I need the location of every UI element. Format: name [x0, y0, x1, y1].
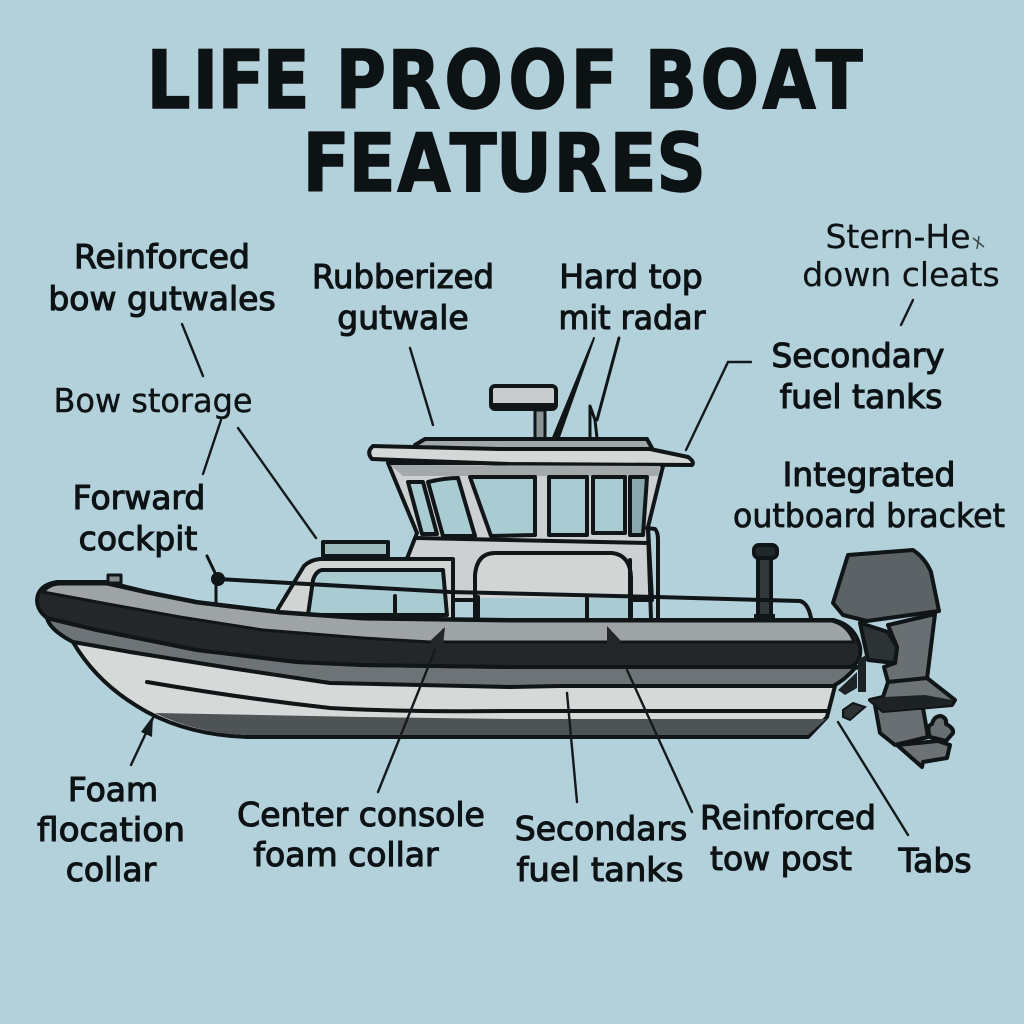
label: reinforced bow gutwales: Reinforced — [74, 237, 250, 276]
label: hard top: Hard top — [559, 257, 703, 296]
handrail — [207, 556, 811, 618]
label: integrated outboard bracket: Integrated — [783, 455, 955, 494]
label: forward cockpit: Forward — [73, 478, 205, 517]
lower grey band — [47, 618, 860, 687]
label: forward cockpit: cockpit — [79, 519, 197, 558]
bow cleat — [108, 575, 121, 583]
rubber collar — [37, 582, 860, 667]
label: stern tie down cleats: down cleats — [802, 255, 1000, 294]
transom and trim tab — [838, 655, 866, 720]
label: integrated outboard bracket — [733, 455, 1005, 535]
lower cabin glass — [480, 598, 630, 620]
title — [147, 34, 863, 210]
title: LIFE PROOF BOAT — [147, 34, 863, 127]
label: rubberized gutwale — [312, 257, 494, 337]
leader lines — [131, 300, 913, 835]
label: integrated outboard bracket: outboard bracket — [733, 496, 1005, 535]
label: bow storage: Bow storage — [54, 381, 252, 420]
label: secondars fuel tanks — [515, 809, 687, 889]
label: center console foam collar — [237, 795, 485, 874]
label: foam flotation collar — [37, 770, 185, 889]
outboard motor — [833, 550, 955, 767]
label: forward cockpit — [73, 478, 205, 558]
label: tabs: Tabs — [897, 841, 972, 880]
cabin door — [475, 553, 631, 620]
radar and antennas — [491, 338, 619, 440]
hull — [73, 642, 835, 737]
label: foam flotation collar: flocation — [37, 810, 185, 849]
label: rubberized gutwale: Rubberized — [312, 257, 494, 296]
hard top cabin — [369, 439, 693, 620]
label: hard top — [558, 257, 706, 337]
label: hard top: mit radar — [558, 298, 706, 337]
label: secondary fuel tanks top: Secondary — [772, 336, 944, 375]
label: center console foam collar: foam collar — [253, 835, 439, 874]
label: reinforced tow post — [700, 798, 876, 878]
label: foam flotation collar: collar — [66, 850, 157, 889]
boat illustration — [37, 338, 955, 767]
label: secondars fuel tanks: Secondars — [515, 809, 687, 848]
label: secondars fuel tanks: fuel tanks — [516, 850, 684, 889]
forward cockpit — [278, 542, 478, 620]
label: secondary fuel tanks top: fuel tanks — [780, 377, 942, 416]
label: reinforced bow gutwales: bow gutwales — [48, 279, 276, 318]
label: foam flotation collar: Foam — [68, 770, 158, 809]
label: reinforced tow post: Reinforced — [700, 798, 876, 837]
tow post — [754, 545, 777, 620]
label: reinforced tow post: tow post — [710, 839, 852, 878]
label: rubberized gutwale: gutwale — [337, 298, 469, 337]
label: reinforced bow gutwales — [48, 237, 276, 318]
label: stern tie down cleats — [802, 217, 1000, 294]
title: FEATURES — [303, 117, 706, 210]
label: secondary fuel tanks top — [772, 336, 944, 416]
label: center console foam collar: Center console — [237, 795, 485, 834]
label: stern tie down cleats: Stern-He — [825, 217, 971, 256]
